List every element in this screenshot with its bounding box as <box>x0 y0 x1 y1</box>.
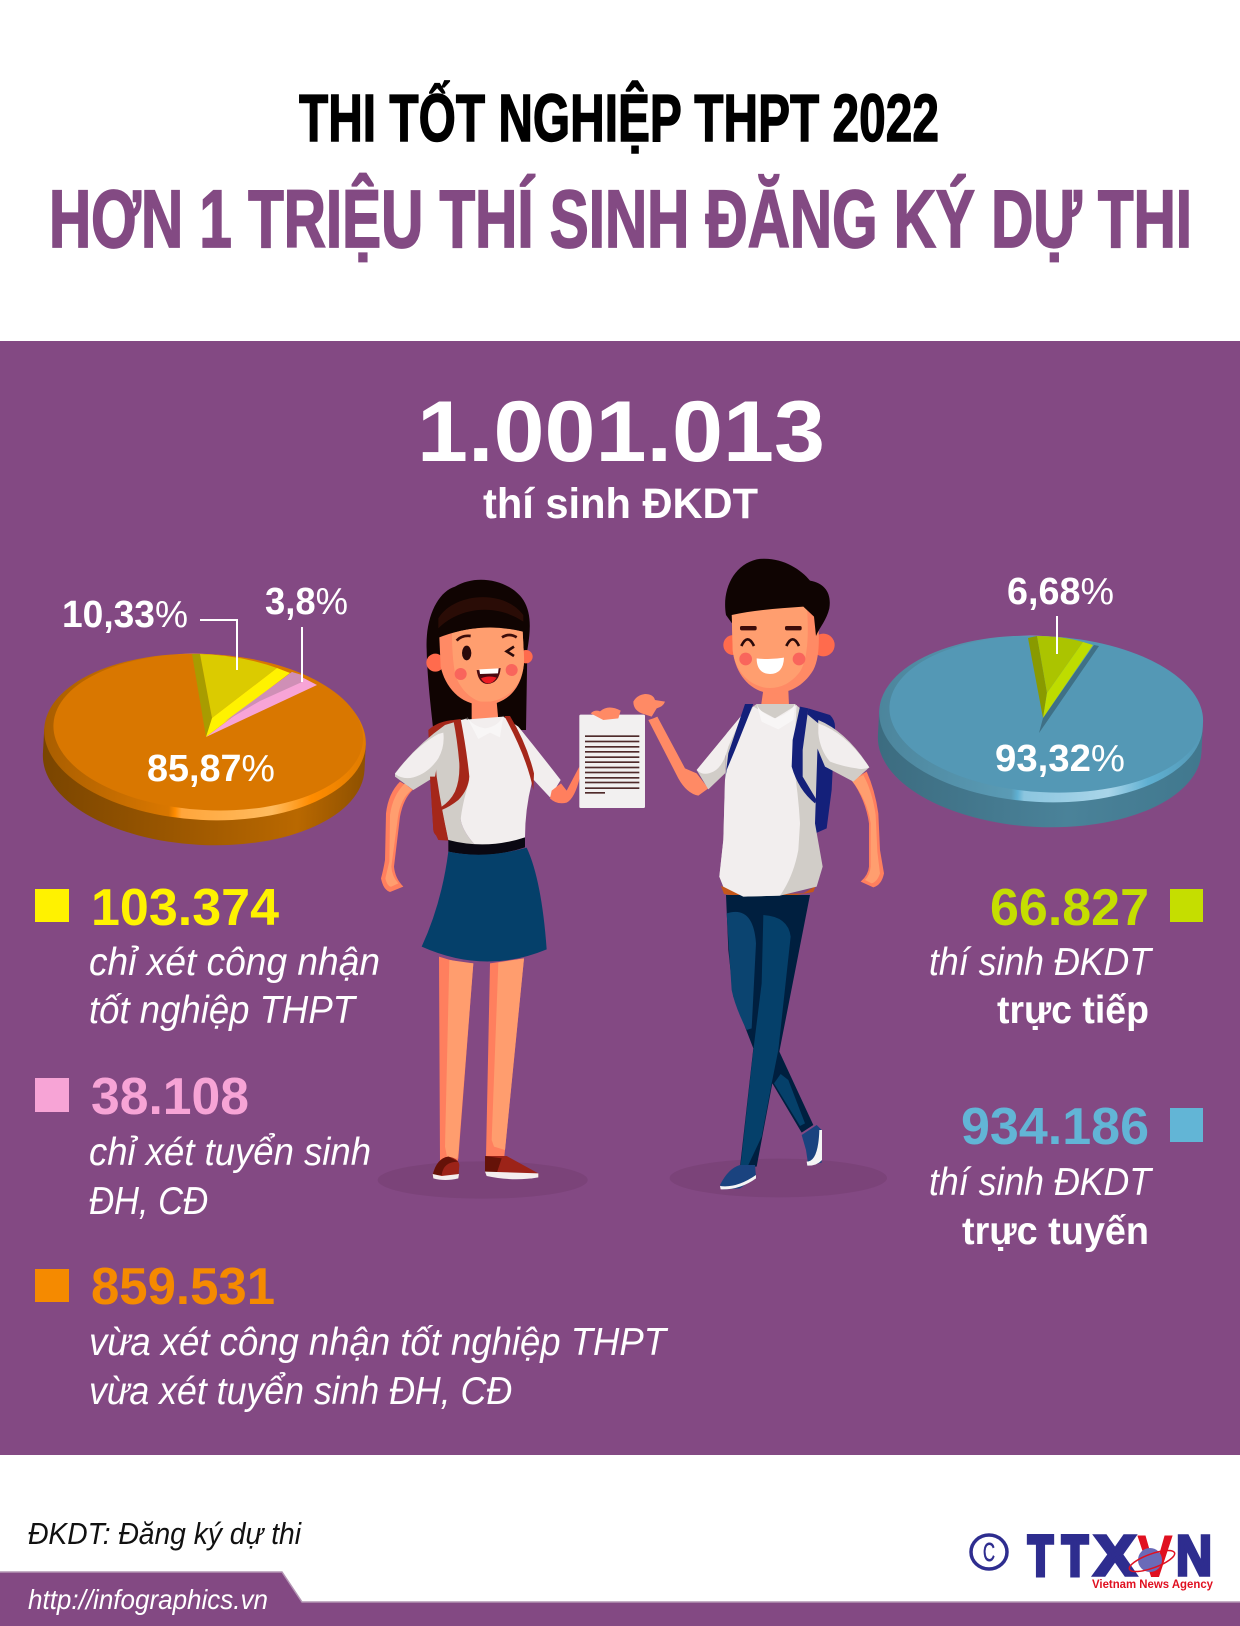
legend: 38.108: chỉ xét tuyển sinh <box>89 1131 371 1174</box>
footer bar with url tab <box>0 1572 1240 1626</box>
legend: 934.186: trực tuyến <box>962 1210 1149 1253</box>
boy <box>633 559 884 1189</box>
girl's hand arm <box>550 767 580 803</box>
slice: 10,33% <box>192 654 290 737</box>
title line 1: THI TỐT NGHIỆP THPT 2022 <box>299 80 939 156</box>
label: 10,33% with leader <box>62 594 237 670</box>
legend: 66.827: trực tiếp <box>997 989 1149 1032</box>
legend: 859.531: vừa xét tuyển sinh ĐH, CĐ <box>89 1370 512 1413</box>
pie chart: exam purpose <box>39 581 370 853</box>
logo: TTXVN: T <box>1062 1524 1088 1588</box>
legend: 934.186: thí sinh ĐKDT <box>929 1161 1154 1204</box>
slice: 3,8% <box>206 672 317 737</box>
slice: 6,68% <box>1028 636 1099 733</box>
legend: 859.531: vừa xét công nhận tốt nghiệp THPT <box>89 1321 669 1364</box>
legend: 66.827 <box>929 879 1203 1032</box>
legend: 66.827: 66.827 <box>990 879 1149 937</box>
legend: 66.827: thí sinh ĐKDT <box>929 941 1154 984</box>
label: 6,68% with leader <box>1007 571 1114 654</box>
illustration: students <box>378 559 887 1199</box>
logo: TTXVN: C <box>983 1537 995 1567</box>
logo: TTXVN: N <box>1176 1524 1212 1588</box>
logo: TTXVN: Vietnam News Agency <box>1092 1577 1213 1591</box>
label: 93,32%: 93,32% <box>995 738 1125 780</box>
pie chart: registration method <box>874 571 1207 835</box>
logo: TTXVN: T <box>1028 1524 1053 1588</box>
legend: 103.374 <box>35 879 380 1032</box>
legend: 38.108: ĐH, CĐ <box>89 1180 208 1223</box>
label: 3,8% with leader: 3,8% <box>265 581 348 623</box>
legend: 38.108: 38.108 <box>91 1068 249 1126</box>
logo: TTXVN: V <box>1137 1523 1173 1590</box>
label: 10,33% with leader: 10,33% <box>62 594 188 636</box>
legend: 859.531 <box>35 1258 669 1413</box>
legend: 859.531: 859.531 <box>91 1258 275 1316</box>
panel: purple background <box>0 341 1240 1455</box>
logo: TTXVN: X <box>1094 1524 1136 1588</box>
total number: 1.001.013 <box>417 384 825 480</box>
total caption: thí sinh ĐKDT <box>483 480 758 528</box>
legend: 103.374: 103.374 <box>91 879 279 937</box>
label: 3,8% with leader <box>265 581 348 682</box>
shadows <box>378 1159 887 1199</box>
label: 85,87%: 85,87% <box>147 748 275 790</box>
label: 6,68% with leader: 6,68% <box>1007 571 1114 613</box>
footnote: ĐKDT: Đăng ký dự thi <box>28 1516 302 1551</box>
legend: 934.186 <box>929 1098 1203 1253</box>
footer bar with url tab: http://infographics.vn <box>28 1584 268 1615</box>
legend: 934.186: 934.186 <box>961 1098 1149 1156</box>
legend: 103.374: chỉ xét công nhận <box>89 941 380 984</box>
legend: 38.108 <box>35 1068 371 1223</box>
logo: TTXVN <box>971 1523 1213 1591</box>
paper document <box>579 707 645 808</box>
girl <box>381 580 561 1180</box>
legend: 103.374: tốt nghiệp THPT <box>89 989 358 1032</box>
